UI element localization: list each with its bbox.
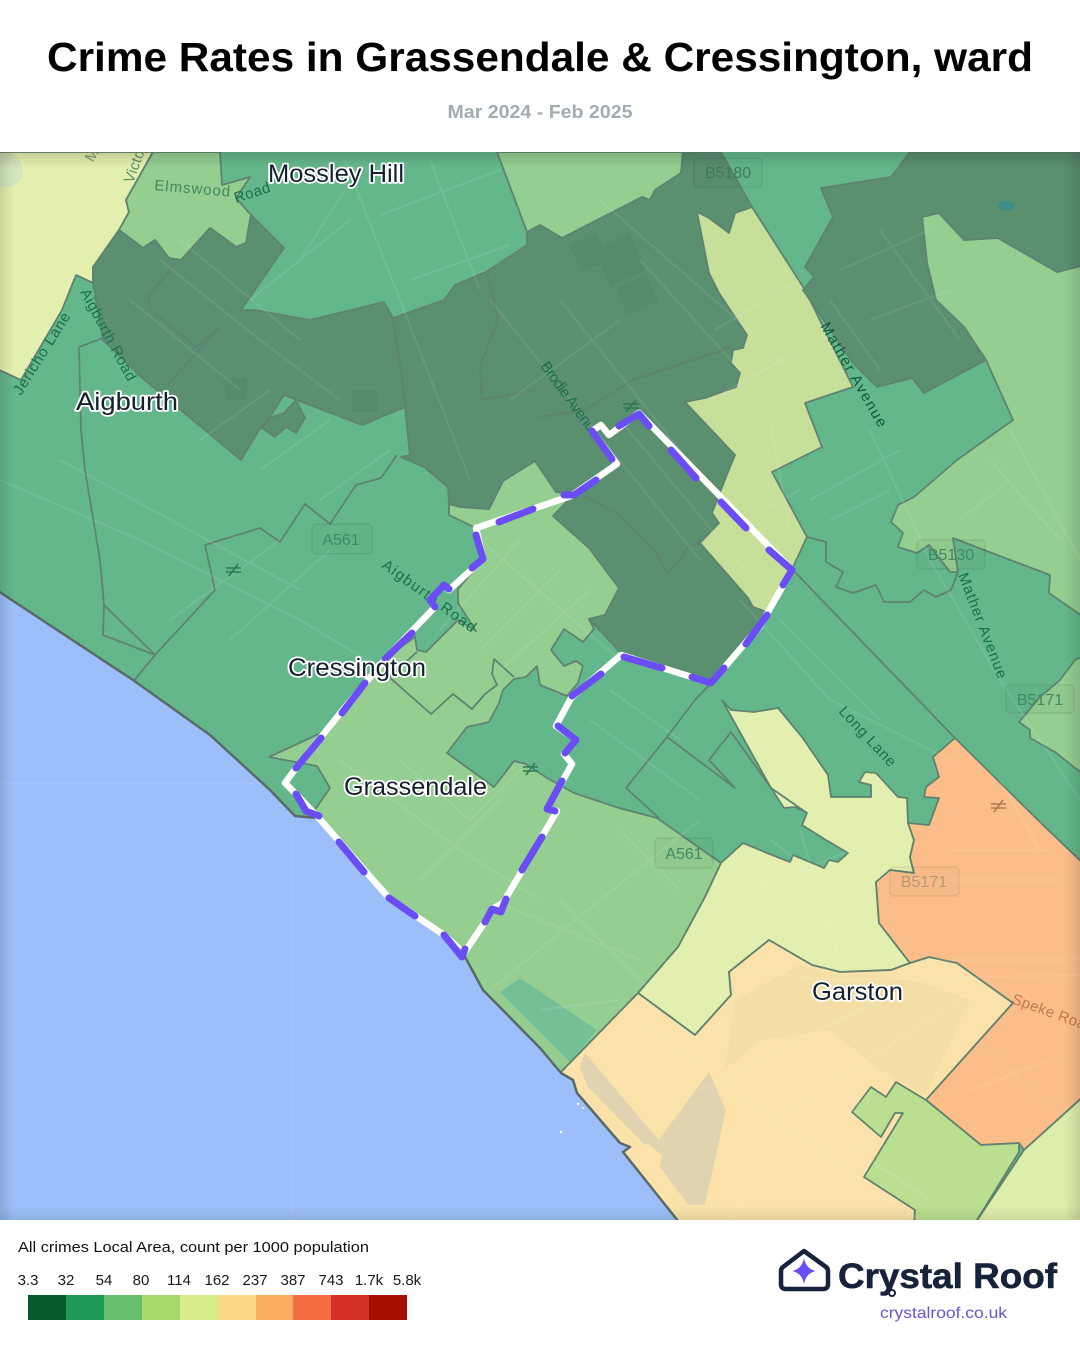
- road name labels: Jericho Lane: [10, 309, 74, 398]
- map edge shading: [0, 152, 1080, 1220]
- legend tick values: [18, 1272, 422, 1289]
- road shield labels: B5171: [1017, 692, 1063, 709]
- legend tick values: 743: [318, 1272, 344, 1289]
- area: light green Elmswood: [119, 152, 251, 260]
- subtitle: date range: Mar 2024 - Feb 2025: [448, 102, 632, 122]
- legend tick values: 5.8k: [393, 1272, 422, 1289]
- area: light green east: [891, 213, 1080, 618]
- road name labels: Mather Avenue: [954, 570, 1010, 681]
- legend tick values: 387: [280, 1272, 306, 1289]
- road network: [0, 160, 1080, 1220]
- title: Crime Rates in Grassendale & Cressington, ward: [47, 34, 1033, 80]
- area: dark green small island: [262, 400, 305, 437]
- place labels: Grassendale: [344, 773, 487, 801]
- road shield labels: B5171: [901, 874, 947, 891]
- water feature north-west: [0, 153, 23, 187]
- road name labels: Aigburth Road: [76, 286, 139, 384]
- area: grey industrial patch two: [640, 1072, 726, 1205]
- road shield labels: B5180: [705, 165, 751, 182]
- legend tick values: 1.7k: [355, 1272, 384, 1289]
- area: orange Speke Road: [876, 738, 1080, 1150]
- road shield labels: [322, 165, 1063, 891]
- area: pale corner south-east: [978, 1098, 1080, 1220]
- area: dark green north-east: [803, 152, 1080, 393]
- place labels: Garston: [812, 978, 903, 1006]
- road shields: [312, 158, 1074, 896]
- area: light green north centre: [497, 152, 683, 238]
- logo: Crystal Roof: [781, 1251, 1057, 1322]
- area: yellow-green strip: [685, 207, 853, 612]
- ward boundary: white line: [285, 413, 792, 953]
- legend tick values: 54: [96, 1272, 112, 1289]
- water feature north-east: [998, 201, 1014, 211]
- road name labels: M: [82, 146, 103, 165]
- area: teal patch on the shoreline: [500, 978, 597, 1062]
- area: light green east edge patch: [1019, 655, 1080, 775]
- area: light green Grassendale and Cressington: [269, 461, 721, 1072]
- road name labels: Aigburth Road: [379, 556, 479, 636]
- darker building blocks in dark zones: [225, 233, 659, 412]
- legend title: All crimes Local Area, count per 1000 population: [18, 1239, 369, 1256]
- road name labels: Mather Avenue: [817, 320, 890, 430]
- railway station icons: [226, 400, 1006, 812]
- place labels: Cressington: [288, 654, 426, 682]
- area: slightly darker beige centre of Garston: [725, 965, 970, 1095]
- legend tick values: 162: [204, 1272, 230, 1289]
- website: crystalroof.co.uk: [880, 1305, 1008, 1322]
- sea: [0, 589, 682, 1226]
- legend colour scale: [28, 1295, 407, 1320]
- place labels: [76, 160, 903, 1006]
- legend tick values: 32: [58, 1272, 74, 1289]
- map base: medium green areas: [0, 152, 1080, 1220]
- road shield labels: A561: [322, 532, 360, 549]
- road shield labels: B5130: [928, 547, 974, 564]
- area: grey industrial patch one: [580, 1053, 650, 1145]
- legend tick values: 3.3: [18, 1272, 38, 1289]
- area: beige Garston: [520, 940, 1019, 1225]
- road shield labels: A561: [665, 846, 703, 863]
- place labels: Aigburth: [76, 388, 178, 416]
- boundary lines between areas: [79, 262, 1080, 865]
- area: lime patch: [852, 1082, 1019, 1225]
- area: pale yellow band north of Garston: [638, 700, 914, 1035]
- area: dark green north-west and centre: [93, 152, 767, 683]
- ward boundary: purple dashes: [296, 414, 792, 957]
- sea specks: [560, 1103, 584, 1133]
- icon: house with star: [781, 1251, 828, 1289]
- road name labels: Brodie Avenue: [537, 358, 603, 441]
- legend tick values: 80: [133, 1272, 149, 1289]
- place labels: Mossley Hill: [268, 160, 404, 188]
- road name labels: Elmswood: [154, 177, 231, 201]
- legend tick values: 114: [167, 1272, 191, 1289]
- sea grid lines: [0, 783, 292, 1220]
- road name labels: Road: [232, 179, 272, 207]
- wordmark: Crystal Roof: [838, 1257, 1057, 1296]
- legend tick values: 237: [242, 1272, 268, 1289]
- legend: [18, 1239, 422, 1320]
- road name labels: [10, 146, 1080, 1036]
- area: pale yellow north-west: [0, 152, 153, 380]
- road name labels: Long Lane: [835, 703, 899, 770]
- road name labels: Victo: [121, 148, 148, 185]
